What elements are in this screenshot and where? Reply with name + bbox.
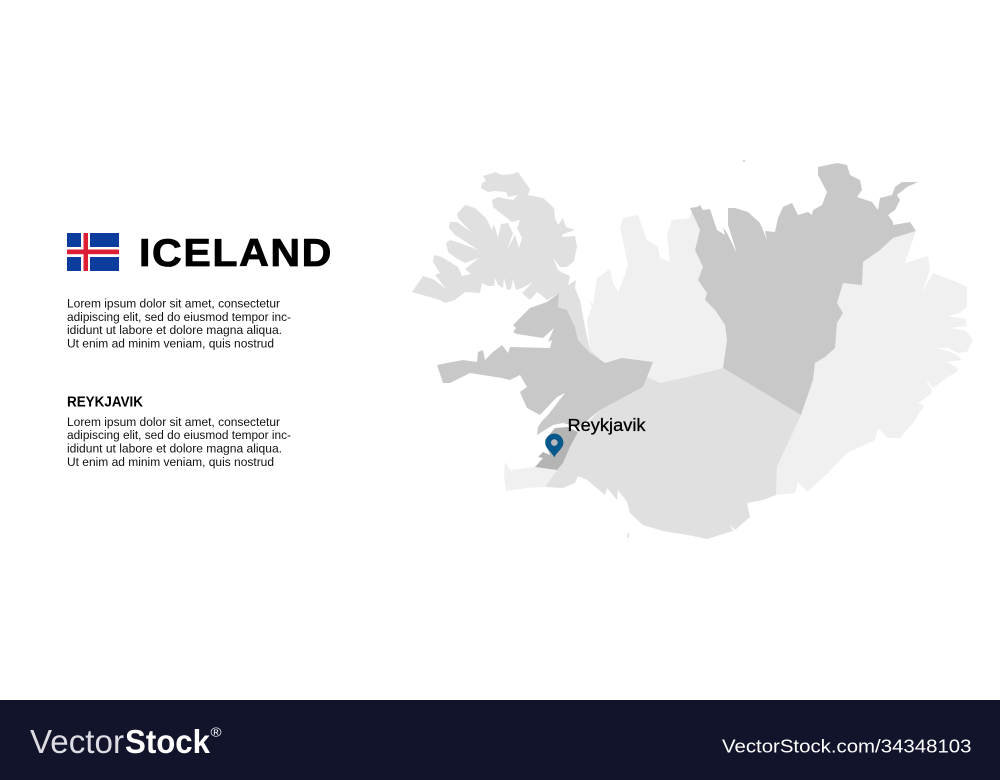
text block: Reykjavik description: Ut enim ad minim veniam, quis nostrud (67, 455, 274, 469)
map of Iceland (412, 160, 973, 539)
island: south (628, 533, 629, 538)
island: north (743, 160, 745, 162)
heading: Reykjavik: REYKJAVIK (67, 395, 143, 411)
text block: Reykjavik description: adipiscing elit, sed do eiusmod tempor inc- (67, 428, 291, 442)
region: south (545, 368, 801, 539)
region: west (437, 293, 653, 435)
icon: location pin (545, 434, 563, 457)
region: east (776, 231, 973, 495)
title: ICELAND (139, 232, 333, 275)
region: northwest light (587, 207, 727, 383)
text block: Reykjavik description: Lorem ipsum dolor sit amet, consectetur (67, 415, 280, 429)
region: north (690, 163, 918, 415)
logo: VectorStock: Stock (125, 723, 211, 760)
text block: intro: ididunt ut labore et dolore magna aliqua. (67, 323, 282, 337)
text block: intro: Ut enim ad minim veniam, quis nostrud (67, 336, 274, 350)
logo: VectorStock: Vector (30, 723, 124, 760)
region: westfjords (412, 172, 605, 363)
region: capital area (535, 427, 578, 470)
image id: VectorStock.com/34348103 (722, 736, 972, 757)
logo: VectorStock (30, 723, 222, 760)
logo: VectorStock: ® (210, 724, 222, 740)
text block: intro (67, 296, 291, 350)
text block: intro: Lorem ipsum dolor sit amet, consectetur (67, 296, 280, 310)
footer bar (0, 700, 1000, 780)
region: southwest peninsula (504, 462, 557, 491)
icon: flag of Iceland (67, 233, 119, 271)
text block: Reykjavik description: ididunt ut labore et dolore magna aliqua. (67, 442, 282, 456)
label: Reykjavik: Reykjavik (568, 415, 646, 435)
text block: Reykjavik description (67, 415, 291, 469)
text block: intro: adipiscing elit, sed do eiusmod tempor inc- (67, 310, 291, 324)
